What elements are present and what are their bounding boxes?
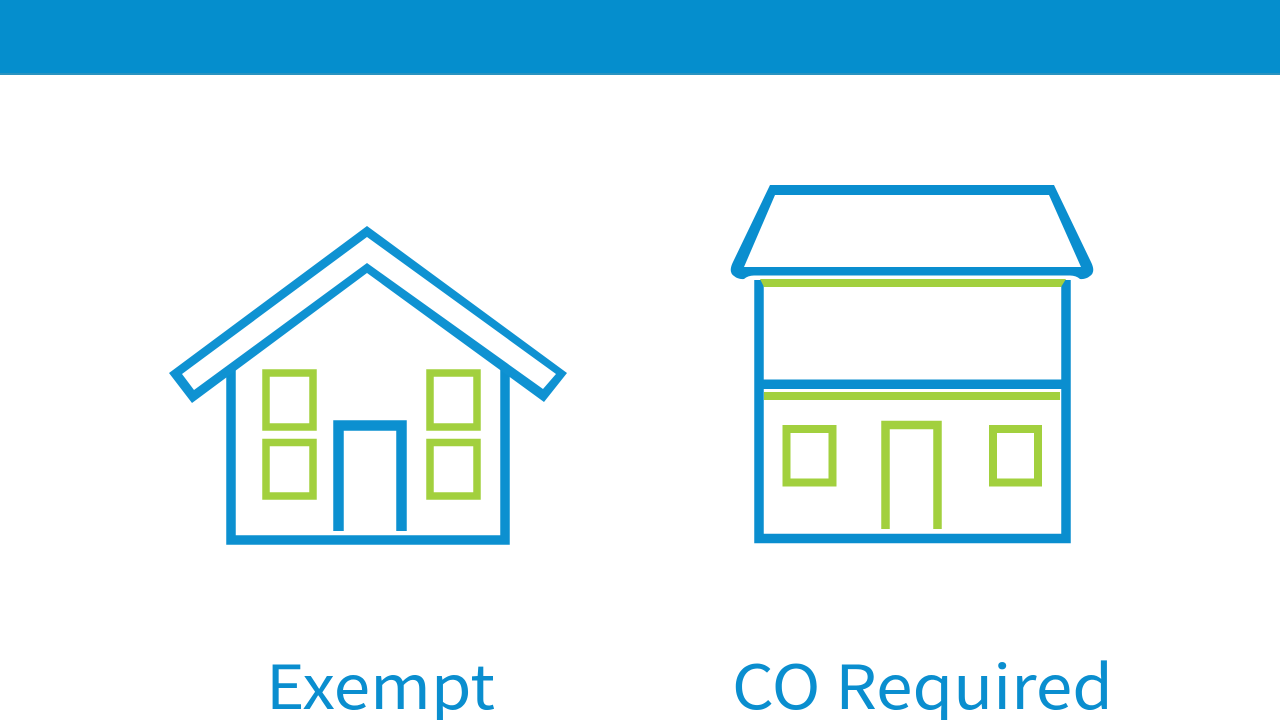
roof <box>731 185 1093 279</box>
house walls <box>231 368 505 540</box>
roof <box>169 226 567 403</box>
windows <box>266 373 477 496</box>
header band <box>0 0 1280 75</box>
floor divider <box>759 380 1066 389</box>
icon: CO required house <box>731 185 1093 538</box>
door <box>338 426 402 531</box>
door <box>886 425 938 529</box>
green ceiling lines <box>760 279 1066 400</box>
windows <box>786 429 1038 482</box>
icon: exempt house <box>169 226 567 540</box>
walls <box>759 280 1066 538</box>
